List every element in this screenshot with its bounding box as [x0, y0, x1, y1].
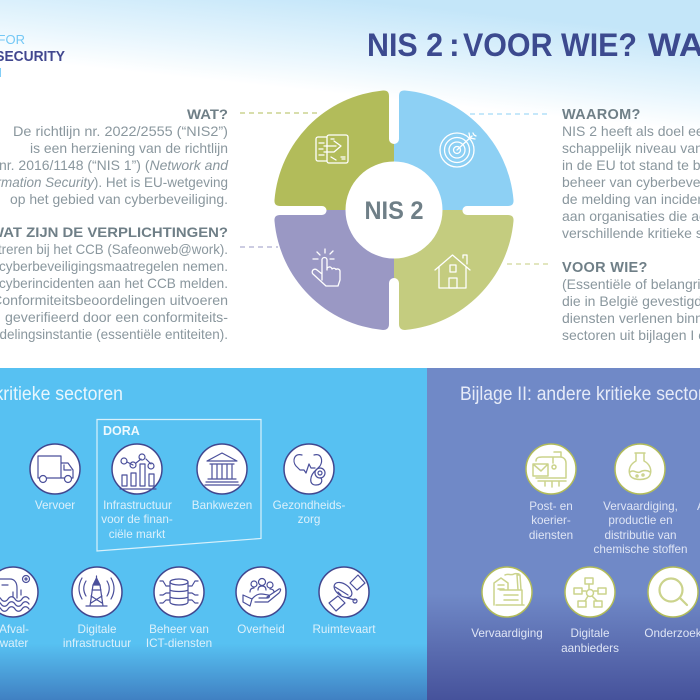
segment: VOOR WIE	[394, 210, 514, 330]
sector: Post- en koerierdiensten: koerier-	[531, 514, 571, 527]
sector: Gezondheidszorg	[273, 444, 345, 526]
sector: Afvalwater	[0, 567, 38, 650]
DORA box: DORA	[103, 424, 140, 438]
icon: documents with arrow	[316, 135, 348, 163]
sector: Digitale aanbieders: Digitale	[571, 627, 609, 640]
sector: Beheer van ICT-diensten	[146, 567, 212, 650]
sector: Vervaardiging: Vervaardiging	[471, 627, 543, 640]
sector: Gezondheidszorg: zorg	[298, 513, 320, 526]
text block: WAAROM?: WAAROM?	[562, 107, 641, 123]
sector: Vervoer	[30, 444, 80, 512]
sector: Ruimtevaart: Ruimtevaart	[312, 623, 376, 636]
sector: Beheer van ICT-diensten: ICT-diensten	[146, 637, 212, 650]
text block: WAT?: is een herziening van de richtlijn	[30, 140, 228, 156]
text block: WAT ZIJN DE VERPLICHTINGEN?: cyberbeveiligingsmaatregelen nemen.	[0, 258, 228, 274]
sector: Post- en koerierdiensten	[526, 444, 576, 542]
text block: WAT?	[0, 106, 229, 207]
sector: Vervaardiging, productie en distributie van chemische stoffen: distributie van	[604, 529, 677, 542]
sector: Infrastructuur voor de financiële markt: Infrastructuur	[103, 499, 172, 512]
dashed connector: WAT	[240, 112, 320, 114]
center circle	[346, 162, 442, 258]
sector: Beheer van ICT-diensten: Beheer van	[149, 623, 209, 636]
text block: WAAROM?	[562, 107, 700, 241]
icon: target	[440, 133, 476, 167]
sector: Overheid: Overheid	[237, 623, 285, 636]
segment: WAAROM	[394, 90, 514, 210]
title	[367, 27, 700, 63]
sector: Vervaardiging, productie en distributie van chemische stoffen: Vervaardiging,	[603, 500, 678, 513]
text block: WAT?: De richtlijn nr. 2022/2555 (“NIS2”)	[13, 123, 228, 139]
text block: VOOR WIE?	[562, 260, 700, 343]
sector: Digitale infrastructuur	[63, 567, 131, 650]
sector: Digitale infrastructuur: Digitale	[78, 623, 116, 636]
panel: Bijlage I	[0, 368, 427, 700]
sector: Vervaardiging	[471, 567, 543, 640]
text block: WAT ZIJN DE VERPLICHTINGEN?	[0, 224, 228, 342]
donut chart: NIS 2	[274, 90, 514, 330]
sector: Onderzoek: Onderzoek	[644, 627, 700, 640]
sector: Ruimtevaart	[312, 567, 376, 636]
icon: pointing hand	[312, 249, 340, 286]
segment: VERPLICHTINGEN	[274, 210, 394, 330]
text block: WAT?: nr. 2016/1148 (“NIS 1”) (Network and	[0, 157, 229, 173]
segment: WAT	[274, 90, 394, 210]
sector: Post- en koerierdiensten: diensten	[529, 529, 573, 542]
sector: Digitale aanbieders	[561, 567, 619, 655]
dashed connector: WAAROM	[470, 113, 550, 115]
sector: Digitale infrastructuur: infrastructuur	[63, 637, 131, 650]
panel: Bijlage II	[427, 368, 700, 700]
center label: NIS 2	[364, 197, 424, 225]
text block: WAT?: WAT?	[187, 106, 228, 122]
text block: VOOR WIE?: VOOR WIE?	[562, 260, 648, 276]
sector: Afvalwater: water	[0, 637, 28, 650]
dashed connector: VERPLICHTINGEN	[240, 246, 278, 248]
text block: WAT ZIJN DE VERPLICHTINGEN?: geverifieerd door een conformiteits-	[5, 309, 228, 325]
logo: Centre for Cybersecurity Belgium	[0, 32, 65, 80]
sector: Vervoer: Vervoer	[35, 499, 75, 512]
sector: Vervaardiging, productie en distributie van chemische stoffen	[594, 444, 688, 556]
sector: Digitale aanbieders: aanbieders	[561, 642, 619, 655]
sector: Post- en koerierdiensten: Post- en	[529, 500, 573, 513]
title: :	[449, 27, 460, 63]
DORA box	[97, 420, 261, 551]
text block: WAT ZIJN DE VERPLICHTINGEN?: cyberincidenten aan het CCB melden.	[0, 275, 228, 291]
icon: house	[435, 255, 470, 288]
sector: Vervaardiging, productie en distributie van chemische stoffen: chemische stoffen	[594, 543, 688, 556]
sector: Infrastructuur voor de financiële markt: ciële markt	[109, 528, 166, 541]
sector: Infrastructuur voor de financiële markt: voor de finan-	[101, 513, 173, 526]
top background gradient	[0, 0, 700, 140]
sector: Overheid	[236, 567, 286, 636]
sector: Infrastructuur voor de financiële markt	[101, 444, 173, 541]
sector: Vervaardiging, productie en distributie van chemische stoffen: productie en	[608, 514, 673, 527]
dashed connector: VOOR WIE	[507, 263, 550, 265]
text block: WAT?: op het gebied van cyberbeveiliging.	[10, 191, 228, 207]
sector: Bankwezen: Bankwezen	[192, 499, 252, 512]
title: NIS 2	[367, 27, 443, 63]
sector: Onderzoek	[644, 567, 700, 640]
sector: Gezondheidszorg: Gezondheids-	[273, 499, 345, 512]
title: VOOR WIE?	[463, 27, 637, 63]
sector: Bankwezen	[192, 444, 252, 512]
